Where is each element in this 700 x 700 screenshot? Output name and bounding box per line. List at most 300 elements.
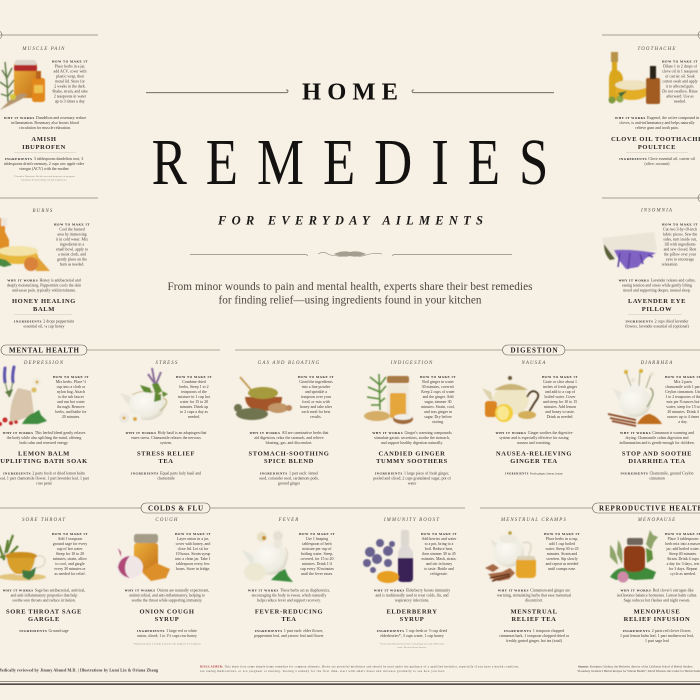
icon: bath soak sachet bbox=[0, 367, 47, 426]
how to make it: a day for 3 days, rest bbox=[667, 561, 700, 567]
remedy name: AMISH bbox=[31, 136, 57, 143]
ingredients: seed, coriander seed, cardamom pods, bbox=[259, 476, 319, 482]
how to make it: into a clean jar. Take 1 bbox=[175, 556, 211, 561]
ingredients: INGREDIENTS 2 parts red clover flower, bbox=[623, 628, 691, 633]
how to make it: mixture in 1 cup hot bbox=[178, 394, 211, 399]
how to make it: eyes to encourage bbox=[666, 256, 694, 262]
how to make it: minutes, strain, allow bbox=[53, 556, 87, 562]
remedy name: CANDIED GINGER bbox=[378, 450, 446, 458]
how to make it: 10 hours. Strain syrup bbox=[176, 551, 210, 556]
how to make it: and sew closed. Rest bbox=[664, 246, 697, 252]
how to make it: minutes. Strain and bbox=[547, 551, 577, 556]
how to make it: water; steep for 15 to bbox=[666, 404, 700, 409]
ingredients: peeled and sliced; 2 cups granulated sugar, pot of bbox=[373, 476, 451, 482]
how to make it: HOW TO MAKE IT bbox=[298, 375, 334, 379]
how to make it: for 3 days. Repeat bbox=[669, 566, 698, 571]
ingredients: INGREDIENTS Clove essential oil, carrier oil bbox=[619, 156, 695, 161]
remedy name: UPLIFTING BATH SOAK bbox=[0, 458, 88, 465]
remedy name: TUMMY SOOTHERS bbox=[376, 458, 448, 465]
how to make it: jar; add boiled water. bbox=[665, 546, 700, 551]
how to make it: Keep 2 cups of water bbox=[421, 389, 455, 394]
remedy name: DIARRHEA TEA bbox=[628, 458, 686, 465]
how to make it: boiled water. Cover bbox=[545, 394, 576, 399]
topic: GAS AND BLOATING bbox=[258, 361, 320, 366]
how to make it: chamomile with 1 part bbox=[665, 384, 700, 389]
card: indigestion bbox=[364, 361, 456, 486]
how to make it: and sprinkle a bbox=[305, 389, 327, 394]
card: cough bbox=[117, 518, 211, 646]
topic: MENSTRUAL CRAMPS bbox=[500, 518, 567, 523]
topic: BURNS bbox=[33, 209, 53, 214]
remedy name: TEA bbox=[281, 616, 297, 623]
how to make it: cotton swab and apply bbox=[662, 78, 698, 84]
how to make it: a moist cloth, and bbox=[58, 252, 86, 258]
why it works: relieve gum and tooth pain. bbox=[635, 125, 679, 130]
how to make it: Place herbs in a cup, bbox=[546, 536, 578, 542]
how to make it: HOW TO MAKE IT bbox=[544, 532, 580, 536]
how to make it: to the tub faucet bbox=[58, 394, 85, 399]
topic: MUSCLE PAIN bbox=[21, 47, 66, 52]
how to make it: then simmer 30 to 45 bbox=[422, 551, 456, 556]
why it works: WHY IT WORKS Sage has antibacterial, antiviral, bbox=[3, 588, 85, 592]
why it works: warming, stimulating herbs that ease menstrual bbox=[497, 592, 572, 598]
why it works: cloves, is anti-inflammatory and helps naturally bbox=[619, 120, 695, 126]
remedy name: GARGLE bbox=[28, 616, 60, 623]
remedy name: ONION COUGH bbox=[139, 608, 195, 616]
why it works: WHY IT WORKS Eugenol, the active compound in bbox=[615, 115, 699, 120]
why it works: WHY IT WORKS Dandelion and rosemary reduce bbox=[4, 115, 86, 120]
icon: honey balm bbox=[0, 218, 50, 271]
topic: INSOMNIA bbox=[640, 208, 673, 214]
why it works: Sage reduces hot flashes and night sweats. bbox=[624, 598, 690, 602]
remedy name: TEA bbox=[158, 458, 174, 465]
title: remedies: REMEDIES bbox=[152, 125, 548, 198]
how to make it: Mix 2 parts bbox=[674, 379, 693, 384]
why it works: inflammation. Rosemary also boosts blood bbox=[11, 120, 79, 125]
how to make it: HOW TO MAKE IT bbox=[420, 375, 456, 379]
ingredients: essential oil, ¼ cup honey bbox=[24, 324, 64, 330]
ingredients: vinegar (ACV) with the mother bbox=[19, 166, 70, 171]
icon: fever tea pot bbox=[241, 531, 293, 582]
how to make it: tablespoon of herb bbox=[302, 541, 332, 546]
how to make it: fabric pieces. Sew the bbox=[663, 232, 698, 236]
how to make it: boiling water. Steep, bbox=[301, 551, 333, 557]
how to make it: Place herbs in a jar, bbox=[55, 64, 85, 70]
how to make it: water for 15 to 20 bbox=[180, 399, 208, 404]
why it works: aid digestion, relax the stomach, and relieve bbox=[254, 435, 324, 441]
how to make it: minutes. Strain, cool, bbox=[421, 404, 455, 410]
how to make it: fill with ingredients bbox=[664, 242, 696, 246]
topic: DEPRESSION bbox=[23, 361, 64, 366]
how to make it: relaxation. bbox=[662, 262, 678, 266]
remedy name: LAVENDER EYE bbox=[628, 298, 686, 305]
icon: ginger tea pot bbox=[482, 376, 538, 422]
ingredients: INGREDIENTS 2 parts fresh or dried lemon balm bbox=[3, 470, 85, 476]
how to make it: ounces up to 4 times bbox=[667, 414, 700, 419]
remedy name: STOMACH-SOOTHING bbox=[249, 450, 329, 458]
how to make it: every 30 minutes or bbox=[54, 566, 86, 571]
card: gas and bloating bbox=[234, 361, 334, 486]
icon: chamomile pot and cinnamon bbox=[608, 369, 662, 426]
how to make it: and honey to taste. bbox=[545, 409, 575, 414]
why it works: WHY IT WORKS Red clover's estrogen-like bbox=[620, 588, 694, 592]
why it works: stimulate gastric secretions, soothe the stomach, bbox=[374, 435, 450, 441]
header block bbox=[146, 78, 554, 306]
card: nausea bbox=[482, 361, 578, 476]
how to make it: plastic wrap, then bbox=[56, 74, 84, 80]
icon: teapot and honey bbox=[485, 531, 536, 581]
how to make it: each meal for best bbox=[302, 409, 331, 414]
remedy name: IBUPROFEN bbox=[22, 144, 66, 151]
disclaimer: are taking medications, or are pregnant or nursing. Testing a remedy for the first time, start with small doses and increase gradually to see how you feel. bbox=[200, 669, 445, 674]
ingredients: INGREDIENTS 2 cups dried lavender bbox=[626, 318, 688, 324]
why it works: system and is especially effective for easing bbox=[499, 435, 569, 440]
ingredients: 1 part sage leaf bbox=[645, 638, 670, 643]
why it works: WHY IT WORKS This herbal blend gently relaxes bbox=[3, 430, 85, 435]
topic: IMMUNITY BOOST bbox=[383, 518, 440, 523]
remedy name: LEMON BALM bbox=[18, 450, 70, 458]
how to make it: up to 3 times a day. bbox=[55, 98, 85, 104]
how to make it: minutes. Mash, strain, bbox=[422, 556, 456, 562]
how to make it: and the ginger. Add bbox=[423, 394, 453, 399]
icon: herbal infusion jar bbox=[610, 530, 658, 582]
how to make it: sugar, simmer 30 bbox=[424, 399, 452, 405]
how to make it: into a fine powder bbox=[302, 384, 331, 389]
why it works: circulation for muscle relaxation. bbox=[19, 125, 71, 130]
section pill: reproductive health: REPRODUCTIVE HEALTH bbox=[599, 505, 700, 513]
intro text: for finding relief—using ingredients found in your kitchen bbox=[218, 294, 482, 306]
how to make it: HOW TO MAKE IT bbox=[53, 375, 89, 379]
remedy name: MENOPAUSE bbox=[634, 608, 680, 616]
why it works: WHY IT WORKS All are carminative herbs that bbox=[249, 430, 329, 435]
remedy name: FEVER-REDUCING bbox=[255, 608, 323, 616]
card: stress bbox=[119, 361, 212, 480]
how to make it: honey and take after bbox=[300, 404, 333, 409]
ingredients: INGREDIENTS Ground sage bbox=[19, 628, 69, 633]
remedy name: RELIEF TEA bbox=[511, 616, 557, 623]
how to make it: hours. Store in fridge. bbox=[176, 566, 210, 571]
how to make it: HOW TO MAKE IT bbox=[662, 60, 698, 64]
how to make it: minutes. Add lemon bbox=[544, 404, 576, 409]
why it works: respiratory infections. bbox=[395, 598, 429, 602]
card: immunity boost bbox=[363, 518, 457, 649]
how to make it: sides, turn inside out, bbox=[663, 236, 697, 242]
ingredients: leaf, 1 part chamomile flower, 1 part lavender leaf, 1 part bbox=[0, 476, 90, 482]
why it works: easing tension and stress while gently lifting bbox=[622, 282, 692, 288]
topic: INDIGESTION bbox=[390, 361, 433, 366]
why it works: system. bbox=[160, 440, 172, 445]
how to make it: minutes. Drink 1/4 bbox=[302, 561, 332, 566]
how to make it: storing. bbox=[432, 419, 444, 424]
ingredients: elderberries*, 3 cups water, 1 cup honey bbox=[380, 633, 444, 639]
how to make it: Ceylon cinnamon. Use bbox=[665, 389, 700, 394]
why it works: eases stress. Chamomile relaxes the nervous bbox=[131, 435, 201, 440]
why it works: soothe the throat while supporting immunity. bbox=[132, 598, 202, 602]
why it works: both calm and renewed energy. bbox=[20, 440, 69, 445]
topic: NAUSEA bbox=[520, 361, 547, 366]
how to make it: and repeat as needed bbox=[546, 561, 578, 566]
card: sore throat bbox=[0, 518, 88, 633]
how to make it: Use 1 heaping bbox=[306, 536, 328, 541]
why it works: deeply moisturizing. Peppermint cools the skin bbox=[7, 282, 81, 288]
why it works: and eases pain, typically within minutes. bbox=[12, 288, 76, 294]
how to make it: Boil ginger in water bbox=[422, 379, 454, 384]
how to make it: herb mix into a mason bbox=[665, 541, 700, 546]
how to make it: burn as needed. bbox=[60, 262, 84, 266]
section pill: mental health bbox=[1, 345, 87, 355]
how to make it: to taste. Bottle and bbox=[424, 566, 454, 571]
why it works: inflammation and is gentle enough for children. bbox=[619, 440, 695, 445]
topic: TOOTHACHE bbox=[637, 47, 677, 52]
how to make it: needed. bbox=[674, 98, 686, 104]
how to make it: cycle as needed. bbox=[670, 571, 696, 576]
how to make it: HOW TO MAKE IT bbox=[52, 532, 88, 536]
remedy name: HONEY HEALING bbox=[12, 298, 76, 305]
ingredients: flowers, lavender essential oil (optional) bbox=[625, 324, 689, 330]
how to make it: afterward. Use as bbox=[666, 94, 694, 98]
card: fever bbox=[241, 518, 335, 639]
why it works: isoflavones balance hormones. Lemon balm calms. bbox=[617, 592, 697, 598]
card: diarrhea bbox=[608, 361, 700, 480]
ingredients: (olive, coconut) bbox=[645, 161, 670, 167]
section pill: colds and flu bbox=[141, 503, 210, 513]
icon: sage tea cup bbox=[0, 535, 46, 580]
how to make it: cover with honey, and bbox=[176, 541, 210, 547]
how to make it: Shake, strain, and take bbox=[52, 88, 88, 94]
ingredients: INGREDIENTS 2 drops peppermint bbox=[14, 318, 74, 324]
why it works: discomfort. bbox=[525, 598, 543, 602]
how to make it: clove oil in 1 teaspoon bbox=[662, 68, 698, 74]
why it works: WHY IT WORKS Holy basil is an adaptogen that bbox=[126, 430, 206, 435]
why it works: and support healthy digestion naturally. bbox=[381, 440, 443, 445]
how to make it: a day. bbox=[678, 419, 688, 424]
how to make it: add 1 cup boiled bbox=[549, 541, 575, 546]
why it works: WHY IT WORKS Onions are naturally expectorant, bbox=[125, 588, 209, 592]
topic: COUGH bbox=[155, 518, 179, 523]
how to make it: as needed for relief. bbox=[54, 571, 86, 576]
how to make it: 20 minutes. Drink 4 bbox=[667, 409, 699, 414]
how to make it: to a pot, bring to a bbox=[425, 541, 454, 547]
how to make it: 30 minutes, covered. bbox=[422, 384, 454, 390]
ingredients: cinnamon bark, 1 teaspoon chopped dried or bbox=[499, 633, 570, 639]
how to make it: until cramps ease. bbox=[548, 566, 576, 571]
how to make it: Strain. Drink 4 cups bbox=[667, 556, 699, 561]
section pill: mental health: MENTAL HEALTH bbox=[9, 347, 80, 355]
how to make it: Place 3 tablespoons bbox=[667, 536, 699, 541]
how to make it: area by immersing bbox=[57, 232, 87, 236]
topic: SORE THROAT bbox=[22, 518, 66, 523]
why it works: helps reduce fever and support recovery. bbox=[257, 598, 321, 602]
footnote: nursing or breastfeeding. Consult a physician. bbox=[21, 178, 67, 182]
how to make it: HOW TO MAKE IT bbox=[54, 222, 90, 226]
how to make it: minutes. Drink up bbox=[180, 404, 208, 409]
how to make it: and add to a cup of bbox=[545, 389, 576, 394]
how to make it: herbs, and bathe for bbox=[55, 409, 87, 415]
topic: MENOPAUSE bbox=[637, 518, 676, 523]
how to make it: Drink as needed. bbox=[547, 414, 573, 419]
why it works: nausea and vomiting. bbox=[517, 440, 551, 445]
how to make it: Layer onion in a jar, bbox=[177, 536, 209, 542]
footnote: *Consult a Physician: Decide uses and frequency of pregnant bbox=[13, 175, 75, 178]
how to make it: close lid. Let sit for bbox=[178, 546, 209, 551]
how to make it: ground sage for every bbox=[53, 541, 87, 546]
how to make it: needed. bbox=[188, 414, 200, 419]
ingredients: INGREDIENTS 1 part each: fennel bbox=[260, 470, 318, 476]
ingredients: INGREDIENTS Equal parts holy basil and bbox=[131, 470, 201, 476]
how to make it: the pillow over your bbox=[664, 252, 697, 256]
section pill: digestion bbox=[502, 345, 565, 355]
card: muscle pain bbox=[0, 47, 88, 182]
ingredients: INGREDIENTS Chamomile, ground Ceylon bbox=[621, 470, 693, 476]
why it works: encouraging the body to sweat, which naturally bbox=[252, 592, 326, 598]
section rules bbox=[0, 31, 700, 508]
ingredients: chamomile bbox=[157, 476, 175, 480]
remedy name: MENSTRUAL bbox=[510, 608, 558, 616]
how to make it: herbs. Steep 1 to 2 bbox=[179, 384, 209, 389]
icon: candied ginger jar bbox=[364, 374, 413, 424]
why it works: antimicrobial, and anti-inflammatory, helping to bbox=[129, 592, 205, 598]
ingredients: ground ginger bbox=[278, 480, 301, 486]
how to make it: Add 1 teaspoon bbox=[58, 536, 82, 541]
ingredients: peppermint leaf, and yarrow leaf and flower bbox=[254, 633, 324, 639]
ingredients: INGREDIENTS 3 tablespoons dandelion root, 3 bbox=[5, 156, 83, 161]
how to make it: of carrier oil. Soak bbox=[665, 74, 695, 78]
ingredients: INGREDIENTS 1 cup fresh or ½ cup dried bbox=[377, 628, 447, 633]
footer double rule bbox=[0, 681, 700, 685]
remedy name: RELIEF INFUSION bbox=[624, 616, 690, 623]
how to make it: 20 minutes. bbox=[62, 414, 80, 419]
card: depression bbox=[0, 361, 90, 486]
how to make it: teaspoons of the bbox=[181, 389, 207, 394]
how to make it: gently place on the bbox=[57, 256, 87, 262]
how to make it: Combine dried bbox=[182, 379, 206, 384]
topic: FEVER bbox=[278, 518, 299, 523]
subtitle: FOR EVERYDAY AILMENTS bbox=[217, 213, 483, 227]
why it works: WHY IT WORKS Cinnamon is warming and bbox=[620, 430, 694, 435]
ingredients: 1 part lemon balm leaf, 1 part motherwort leaf, bbox=[620, 633, 694, 639]
ingredients: tablespoons dried rosemary, 2 cups raw apple cider bbox=[4, 161, 85, 167]
how to make it: HOW TO MAKE IT bbox=[662, 222, 698, 226]
how to make it: mixture per cup of bbox=[302, 546, 332, 551]
topic: STRESS bbox=[156, 361, 178, 366]
how to make it: refrigerate. bbox=[430, 571, 448, 576]
footnote: *Cook and strain berries before consuming; raw and wild berries bbox=[380, 642, 444, 646]
how to make it: cup into a cloth or bbox=[57, 384, 86, 389]
how to make it: HOW TO MAKE IT bbox=[175, 532, 211, 536]
section pill: digestion: DIGESTION bbox=[510, 347, 558, 355]
how to make it: and stir in honey bbox=[426, 561, 452, 566]
why it works: soothe sore throats and reduce irritation. bbox=[12, 598, 76, 602]
how to make it: small bowl, apply to bbox=[56, 246, 88, 252]
how to make it: covered, for 15 to 20 bbox=[301, 556, 333, 562]
how to make it: HOW TO MAKE IT bbox=[665, 532, 700, 536]
card: insomnia bbox=[602, 208, 698, 330]
how to make it: tablespoon every few bbox=[176, 561, 210, 566]
ingredients: rose petal bbox=[36, 480, 53, 486]
footnote: *Syrup lasts up to 2 months if stored in the fridge for 2-3 teaspoons bbox=[133, 642, 201, 646]
ingredients: freshly grated ginger, hot tea (total) bbox=[506, 638, 563, 644]
ornament divider bbox=[190, 251, 512, 257]
remedy name: SYRUP bbox=[155, 616, 179, 623]
how to make it: Steep 40 minutes. bbox=[669, 551, 697, 556]
how to make it: results. bbox=[310, 414, 322, 419]
card: menopause bbox=[610, 518, 700, 643]
how to make it: 1 to 2 teaspoons of the bbox=[665, 394, 700, 399]
why it works: WHY IT WORKS Honey is antibacterial and bbox=[7, 278, 81, 282]
how to make it: through. Remove bbox=[57, 404, 85, 409]
how to make it: 2 weeks in the dark. bbox=[54, 84, 86, 88]
icon: jar, bottle and rosemary bbox=[0, 60, 45, 110]
section pill: colds and flu: COLDS & FLU bbox=[148, 505, 203, 513]
how to make it: boil. Reduce heat, bbox=[425, 546, 453, 552]
how to make it: nylon bag. Attach bbox=[57, 389, 85, 394]
how to make it: add ACV, cover with bbox=[54, 68, 87, 74]
footer credits: Medically reviewed by Jimmy Ahmed M.D. | Illustrations by Lumi Lin & Oriana Zhang bbox=[0, 668, 158, 672]
how to make it: metal lid. Store for bbox=[55, 78, 86, 84]
why it works: WHY IT WORKS Elderberry boosts immunity bbox=[374, 588, 450, 592]
footnote: toxic. Do not eat raw berries. bbox=[397, 646, 427, 649]
how to make it: and toss ginger in bbox=[424, 409, 452, 414]
how to make it: HOW TO MAKE IT bbox=[299, 532, 335, 536]
card: burns bbox=[0, 209, 90, 330]
how to make it: Grate or slice about 1 bbox=[543, 379, 577, 384]
remedy name: BALM bbox=[33, 306, 55, 313]
icon: spice bowl bbox=[234, 377, 292, 420]
how to make it: Add berries and water bbox=[422, 536, 457, 541]
how to make it: HOW TO MAKE IT bbox=[421, 532, 457, 536]
why it works: and is traditionally used to treat colds, flu, and bbox=[375, 592, 449, 598]
how to make it: Steep for 10 to 20 bbox=[56, 551, 84, 556]
how to make it: food, or mix with bbox=[302, 399, 330, 405]
how to make it: HOW TO MAKE IT bbox=[52, 60, 88, 64]
icon: elderberry syrup bbox=[363, 530, 413, 583]
remedy name: ELDERBERRY bbox=[386, 608, 438, 616]
how to make it: cup of hot water. bbox=[57, 546, 83, 551]
how to make it: inches of fresh ginger bbox=[543, 384, 578, 389]
how to make it: Mix herbs. Place ½ bbox=[56, 379, 86, 384]
how to make it: it in cold water. Mix bbox=[56, 236, 88, 242]
remedy name: SORE THROAT SAGE bbox=[6, 608, 82, 616]
why it works: WHY IT WORKS Ginger soothes the digestive bbox=[496, 430, 572, 435]
why it works: drying. Chamomile calms digestion and bbox=[626, 435, 688, 440]
ingredients: water bbox=[408, 480, 417, 486]
why it works: and anti-inflammatory properties that help bbox=[11, 592, 77, 598]
remedy name: NAUSEA-RELIEVING bbox=[496, 450, 572, 458]
how to make it: until the fever eases. bbox=[301, 571, 333, 576]
how to make it: Do not swallow. Rinse bbox=[662, 88, 698, 94]
icon: lavender pillow bbox=[602, 232, 657, 269]
why it works: the body while also uplifting the mind, offering bbox=[7, 435, 81, 441]
how to make it: to 2 cups a day as bbox=[180, 409, 208, 414]
how to make it: and run hot water bbox=[57, 399, 86, 404]
ingredients: INGREDIENTS 1 part each: elder flower, bbox=[255, 628, 323, 633]
remedy name: POULTICE bbox=[638, 144, 676, 151]
source note: "Rosemary Gladstar's Herbal Recipes for Vibrant Health"; David Winston, the Center for Herbal Studies bbox=[577, 669, 700, 674]
how to make it: Cut two 3-by-10-inch bbox=[663, 226, 697, 232]
ingredients: INGREDIENTS 1 large red or white bbox=[137, 628, 197, 633]
why it works: mood and supporting deeper, natural sleep. bbox=[623, 288, 691, 294]
disclaimer: DISCLAIMER: This sheet lists some simple home remedies for common ailments. Herbs are powerful medicines and should be used under the guidance of a qualified herbalist, especially if you have a health condition, bbox=[200, 664, 519, 668]
why it works: WHY IT WORKS Cinnamon and ginger are bbox=[498, 588, 570, 592]
card: toothache bbox=[608, 47, 700, 167]
source note: Sources: Rosemary Gladstar, the Herbalist, director of the California School of Herbal Studies; bbox=[578, 664, 693, 668]
remedy name: STOP AND SOOTHE bbox=[622, 450, 692, 458]
ingredients: cinnamon bbox=[649, 476, 665, 480]
why it works: WHY IT WORKS Lavender relaxes and calms, bbox=[618, 278, 696, 282]
how to make it: and steep for 10 to 15 bbox=[543, 399, 577, 404]
icon: clove oil bottles bbox=[608, 52, 660, 104]
ingredients: onion, sliced; 1 to 1½ cups raw honey bbox=[137, 633, 197, 639]
